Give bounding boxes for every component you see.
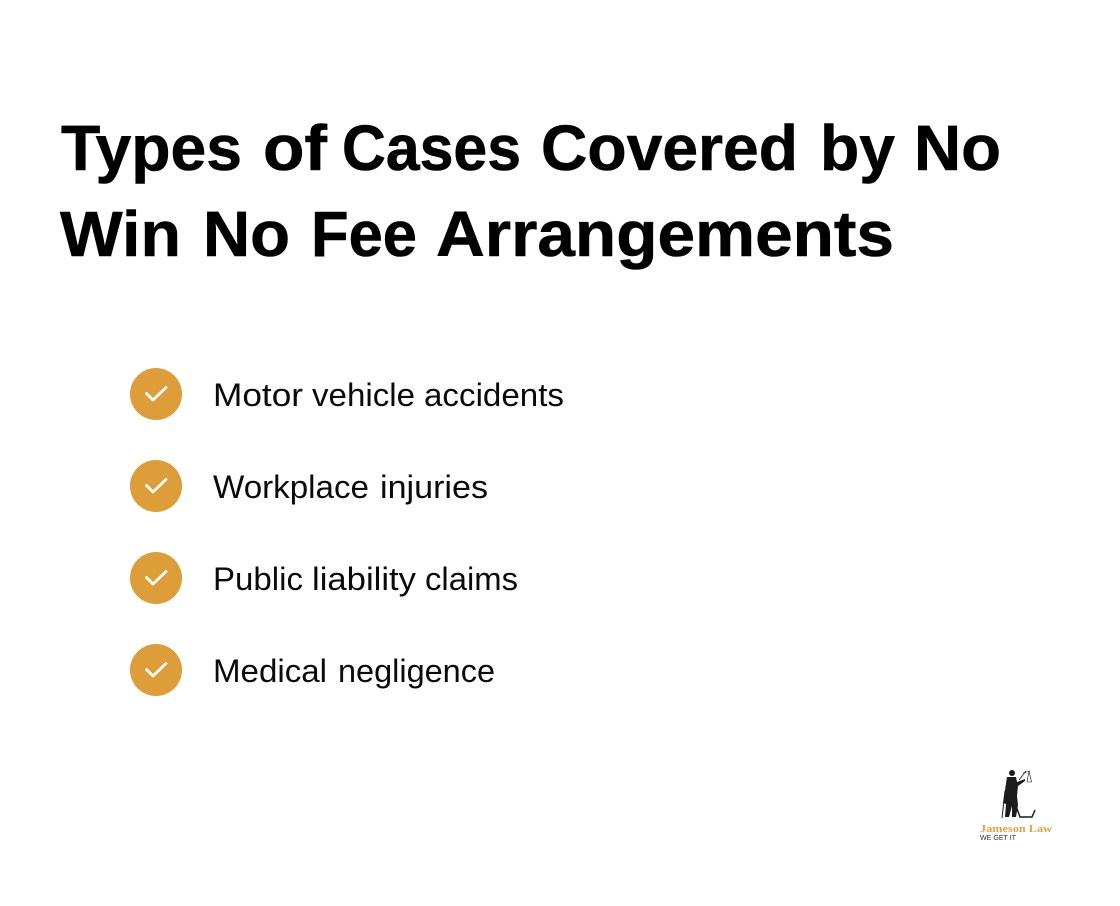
- item: public liability claims: Public: [213, 561, 303, 597]
- checklist: [130, 368, 564, 696]
- title: [60, 112, 1001, 270]
- item: motor vehicle accidents: accidents: [424, 377, 564, 413]
- item: motor vehicle accidents: [130, 368, 564, 420]
- title: Fee: [311, 198, 417, 270]
- logo tagline: WE GET IT: [980, 835, 1017, 842]
- logo: Jameson Law: [980, 770, 1052, 842]
- title: Types: [61, 112, 242, 184]
- title: of: [263, 112, 328, 184]
- item: medical negligence: negligence: [338, 653, 495, 689]
- title: Win: [60, 198, 181, 270]
- item: medical negligence: [130, 644, 495, 696]
- title: Cases: [342, 112, 521, 184]
- title: Covered: [541, 112, 798, 184]
- title: by: [820, 112, 895, 184]
- title: No: [914, 112, 1001, 184]
- title: No: [203, 198, 290, 270]
- item: workplace injuries: injuries: [380, 469, 488, 505]
- item: motor vehicle accidents: Motor: [213, 377, 303, 413]
- title: Arrangements: [436, 198, 894, 270]
- item: workplace injuries: Workplace: [213, 469, 369, 505]
- icon: lady justice: [1002, 770, 1035, 818]
- item: public liability claims: liability: [312, 561, 417, 597]
- item: motor vehicle accidents: vehicle: [312, 377, 415, 413]
- item: medical negligence: Medical: [213, 653, 327, 689]
- item: public liability claims: [130, 552, 518, 604]
- logo wordmark: Jameson Law: [980, 823, 1052, 835]
- item: workplace injuries: [130, 460, 488, 512]
- item: public liability claims: claims: [425, 561, 518, 597]
